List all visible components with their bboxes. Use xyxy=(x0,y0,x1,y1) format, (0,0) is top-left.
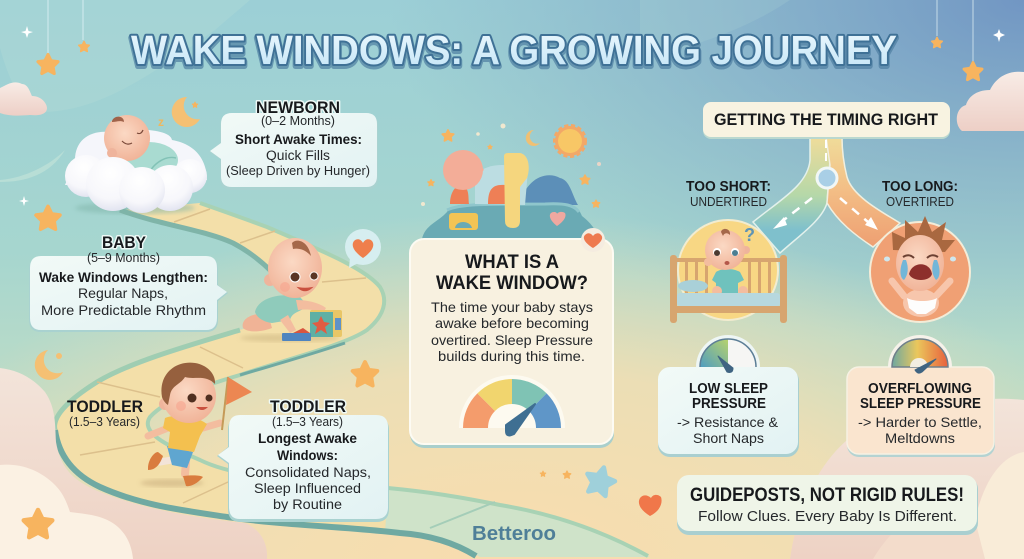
callout: toddler: (1.5–3 Years) xyxy=(272,415,343,429)
icon: newborn on cloud xyxy=(65,97,207,214)
title: WAKE WINDOWS: A GROWING JOURNEY xyxy=(131,27,897,73)
label: too long: TOO LONG: xyxy=(882,179,958,195)
decorative cloud: top left xyxy=(0,82,47,116)
heading: toddler on road: TODDLER xyxy=(67,397,143,416)
icon: crescent moon xyxy=(35,350,63,380)
heading: toddler on road: (1.5–3 Years) xyxy=(69,415,140,429)
panel: overflowing sleep pressure: SLEEP PRESSURE xyxy=(860,396,981,412)
illustration: wake window scene xyxy=(421,124,601,239)
callout: guideposts: GUIDEPOSTS, NOT RIGID RULES! xyxy=(690,485,964,506)
label: too long xyxy=(882,179,958,209)
icon: newborn on cloud: z xyxy=(158,115,164,129)
heading and callout: baby: Wake Windows Lengthen: xyxy=(39,270,208,285)
callout: guideposts xyxy=(677,475,978,535)
panel: low sleep pressure xyxy=(658,367,799,457)
callout: newborn: (Sleep Driven by Hunger) xyxy=(226,163,370,178)
callout: toddler: Sleep Influenced xyxy=(254,481,361,496)
heading and callout: baby xyxy=(29,233,228,332)
callout: toddler: Windows: xyxy=(277,448,338,463)
callout: newborn: Quick Fills xyxy=(266,148,330,163)
callout: toddler: Longest Awake xyxy=(258,431,357,446)
icon: orange heart xyxy=(639,495,662,516)
panel: low sleep pressure: LOW SLEEP xyxy=(689,381,768,397)
heading and callout: baby: BABY xyxy=(102,233,147,252)
decorative clouds: bottom right xyxy=(790,399,1024,559)
icon: running toddler with flag xyxy=(140,363,252,487)
icon: heart badge xyxy=(581,228,605,252)
heading: getting the timing right: GETTING THE TIMING RIGHT xyxy=(714,110,939,129)
heading and callout: baby: (5–9 Months) xyxy=(87,251,160,265)
winding journey road xyxy=(55,203,650,557)
panel: what is a wake window: awake before becoming xyxy=(435,315,589,331)
panel: overflowing sleep pressure: Meltdowns xyxy=(885,430,955,446)
icon: heart speech bubble xyxy=(345,229,381,268)
panel: what is a wake window: WHAT IS A xyxy=(465,251,559,273)
heading and callout: baby: More Predictable Rhythm xyxy=(41,303,206,318)
icon: crawling baby with blocks xyxy=(240,238,342,342)
callout: toddler: TODDLER xyxy=(270,397,346,416)
panel: low sleep pressure: Short Naps xyxy=(693,430,764,446)
panel: overflowing sleep pressure: -> Harder to Settle, xyxy=(858,414,982,430)
label: too short: UNDERTIRED xyxy=(690,195,767,209)
title: WAKE WINDOWS: A GROWING JOURNEY xyxy=(131,29,897,75)
logo: Betteroo: Betteroo xyxy=(472,523,556,545)
icon: junction marker xyxy=(817,168,837,188)
callout: newborn: NEWBORN xyxy=(256,98,340,117)
panel: what is a wake window: overtired. Sleep Pressure xyxy=(431,332,593,348)
callout: newborn xyxy=(209,98,378,190)
panel: overflowing sleep pressure xyxy=(847,367,995,457)
decorative cloud: top right xyxy=(957,72,1024,131)
callout: toddler: Consolidated Naps, xyxy=(245,465,371,480)
chart: sleep pressure gauge xyxy=(459,375,565,435)
icon: undertired baby in crib xyxy=(670,220,787,323)
callout: guideposts: Follow Clues. Every Baby Is Different. xyxy=(698,508,957,525)
icon: blue star and small stars xyxy=(540,464,618,497)
heading: getting the timing right xyxy=(703,102,950,139)
label: too short xyxy=(686,179,771,209)
panel: what is a wake window: WAKE WINDOW? xyxy=(436,272,588,294)
callout: toddler xyxy=(217,397,389,522)
heading: toddler on road xyxy=(67,397,143,429)
chart: overflowing sleep pressure gauge xyxy=(888,335,952,373)
hanging stars and sparkles xyxy=(19,0,1005,386)
callout: newborn: Short Awake Times: xyxy=(235,132,362,147)
panel: low sleep pressure: -> Resistance & xyxy=(677,414,779,430)
panel: what is a wake window xyxy=(410,228,614,448)
icon: overtired crying baby xyxy=(870,216,970,322)
icon: undertired baby in crib: ? xyxy=(744,225,755,245)
fork road: timing paths xyxy=(753,137,900,253)
heading and callout: baby: Regular Naps, xyxy=(78,286,168,301)
decorative clouds: bottom left xyxy=(0,368,267,559)
panel: what is a wake window: The time your baby stays xyxy=(431,299,593,315)
panel: overflowing sleep pressure: OVERFLOWING xyxy=(868,381,972,397)
callout: newborn: (0–2 Months) xyxy=(261,114,335,128)
panel: what is a wake window: builds during this time. xyxy=(438,348,585,364)
callout: toddler: by Routine xyxy=(273,497,342,512)
label: too long: OVERTIRED xyxy=(886,195,954,209)
panel: low sleep pressure: PRESSURE xyxy=(692,396,766,412)
label: too short: TOO SHORT: xyxy=(686,179,771,195)
chart: low sleep pressure gauge xyxy=(696,335,760,372)
